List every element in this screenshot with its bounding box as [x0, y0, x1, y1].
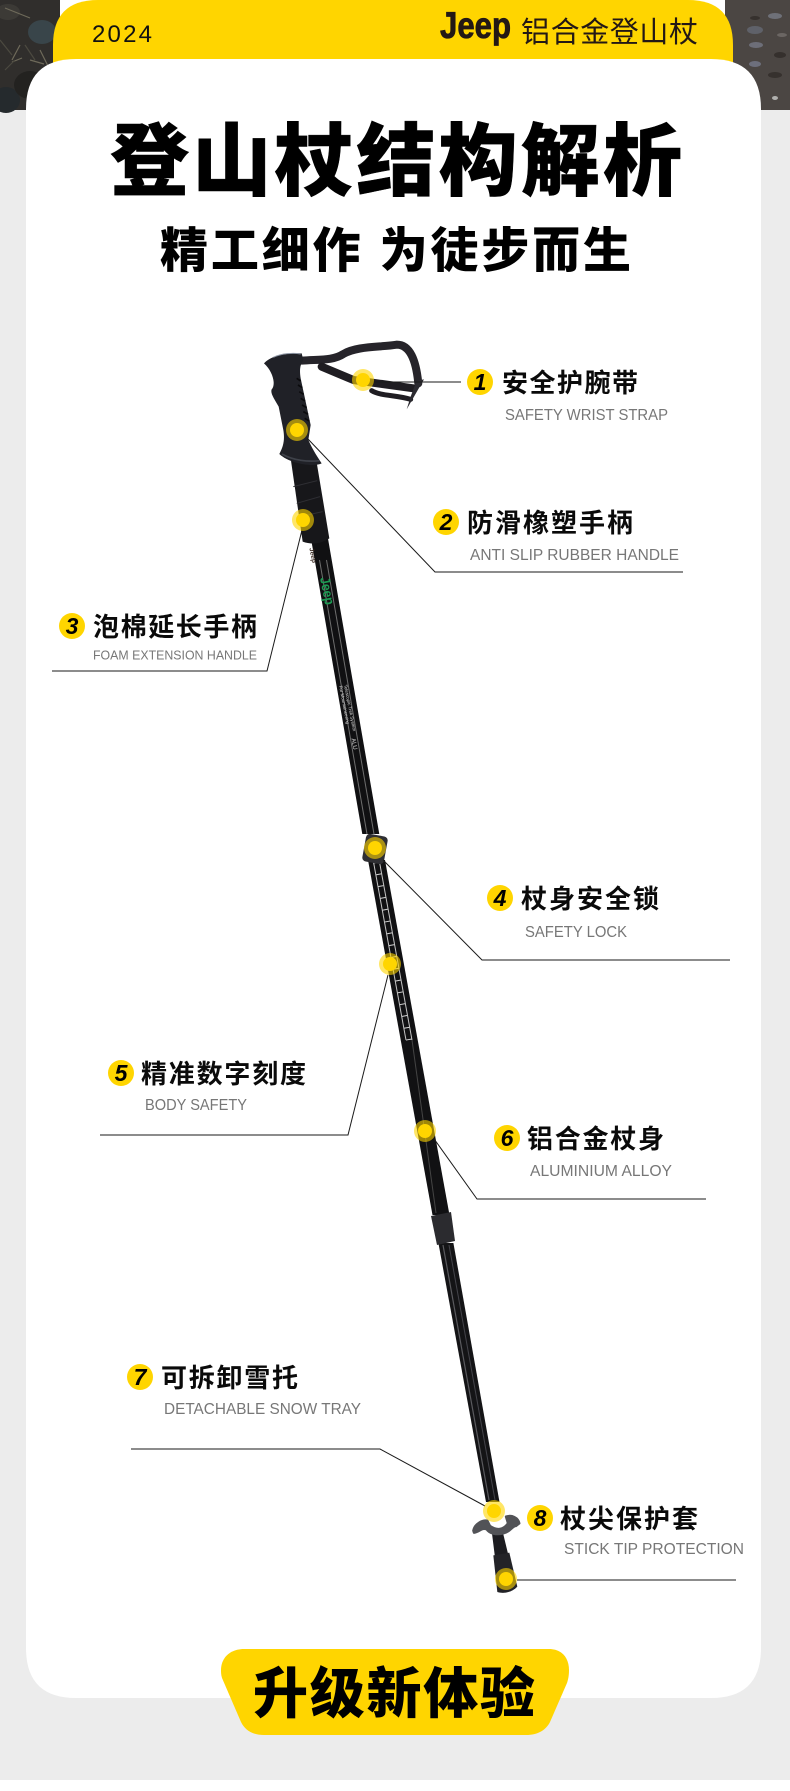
- callout 2: rubber handle: 防滑橡塑手柄: [467, 508, 633, 538]
- shaft joint: [431, 1212, 455, 1245]
- background photo strip: [0, 0, 790, 113]
- callout 6: aluminium alloy: ALUMINIUM ALLOY: [530, 1163, 672, 1180]
- trekking pole illustration: [264, 345, 519, 1593]
- callout 4: safety lock: SAFETY LOCK: [525, 924, 627, 941]
- header product name: 铝合金登山杖: [521, 16, 698, 49]
- bottom yellow button: [221, 1649, 569, 1735]
- callout 3: foam handle: 3: [66, 613, 79, 639]
- wrist strap: [302, 345, 424, 409]
- callout 2: rubber handle: 2: [439, 509, 453, 535]
- green Jeep logo on shaft: Jeep: [317, 576, 338, 606]
- white shaft print: [338, 684, 360, 751]
- snow basket and tip: [473, 1516, 519, 1593]
- shaft logos: Jeep: [307, 547, 317, 564]
- brand: Jeep logo: Jeep: [440, 5, 511, 46]
- callout 7: snow tray: [127, 1363, 361, 1418]
- callout 6: aluminium alloy: 铝合金杖身: [527, 1124, 664, 1154]
- title: 登山杖结构解析: [110, 117, 682, 206]
- foam handle: [291, 458, 329, 564]
- callout 8: tip protection: STICK TIP PROTECTION: [564, 1541, 744, 1558]
- callout 7: snow tray: 7: [134, 1364, 148, 1390]
- white shaft print: ALU: [349, 738, 358, 750]
- callout 4: safety lock: 4: [493, 885, 507, 911]
- callout 3: foam handle: FOAM EXTENSION HANDLE: [93, 648, 257, 662]
- callout 6: aluminium alloy: 6: [501, 1125, 514, 1151]
- top yellow header tab: [53, 0, 733, 100]
- shaft upper section: [310, 530, 379, 834]
- callout 2: rubber handle: ANTI SLIP RUBBER HANDLE: [470, 547, 679, 564]
- rubber grip: [264, 353, 322, 465]
- callout 4: safety lock: 杖身安全锁: [521, 884, 659, 914]
- callout 5: digital scale: [108, 1059, 306, 1114]
- button text: 升级新体验: [253, 1663, 535, 1725]
- callout 1: wrist strap: 安全护腕带: [502, 368, 638, 398]
- callout 6: aluminium alloy: [494, 1124, 672, 1180]
- callout 5: digital scale: 5: [115, 1060, 129, 1086]
- callout 3: foam handle: [59, 612, 257, 662]
- callout 7: snow tray: 可拆卸雪托: [161, 1363, 298, 1393]
- callout 5: digital scale: BODY SAFETY: [145, 1097, 247, 1114]
- callout 3: foam handle: 泡棉延长手柄: [93, 612, 257, 642]
- callout 1: wrist strap: SAFETY WRIST STRAP: [505, 407, 668, 424]
- callout 7: snow tray: DETACHABLE SNOW TRAY: [164, 1401, 361, 1418]
- safety lock: [362, 833, 388, 865]
- callout 5: digital scale: 精准数字刻度: [141, 1059, 306, 1089]
- marker dots on pole: [286, 369, 517, 1590]
- shaft middle section with scale: [368, 860, 450, 1215]
- shaft lower section: [438, 1243, 500, 1502]
- year label: 2024: [92, 21, 152, 48]
- leader lines: [52, 382, 736, 1580]
- callout 2: rubber handle: [433, 508, 679, 564]
- callout 4: safety lock: [487, 884, 659, 941]
- callout 8: tip protection: 8: [534, 1505, 547, 1531]
- callout 1: wrist strap: [467, 368, 668, 424]
- white shaft print: For Mountaineering: [338, 685, 351, 725]
- subtitle: 精工细作 为徒步而生: [160, 225, 631, 278]
- callout 8: tip protection: [527, 1504, 744, 1558]
- callout 8: tip protection: 杖尖保护套: [560, 1504, 698, 1534]
- white shaft print: Telescopic Trek System: [343, 684, 357, 732]
- callout 1: wrist strap: 1: [474, 369, 486, 395]
